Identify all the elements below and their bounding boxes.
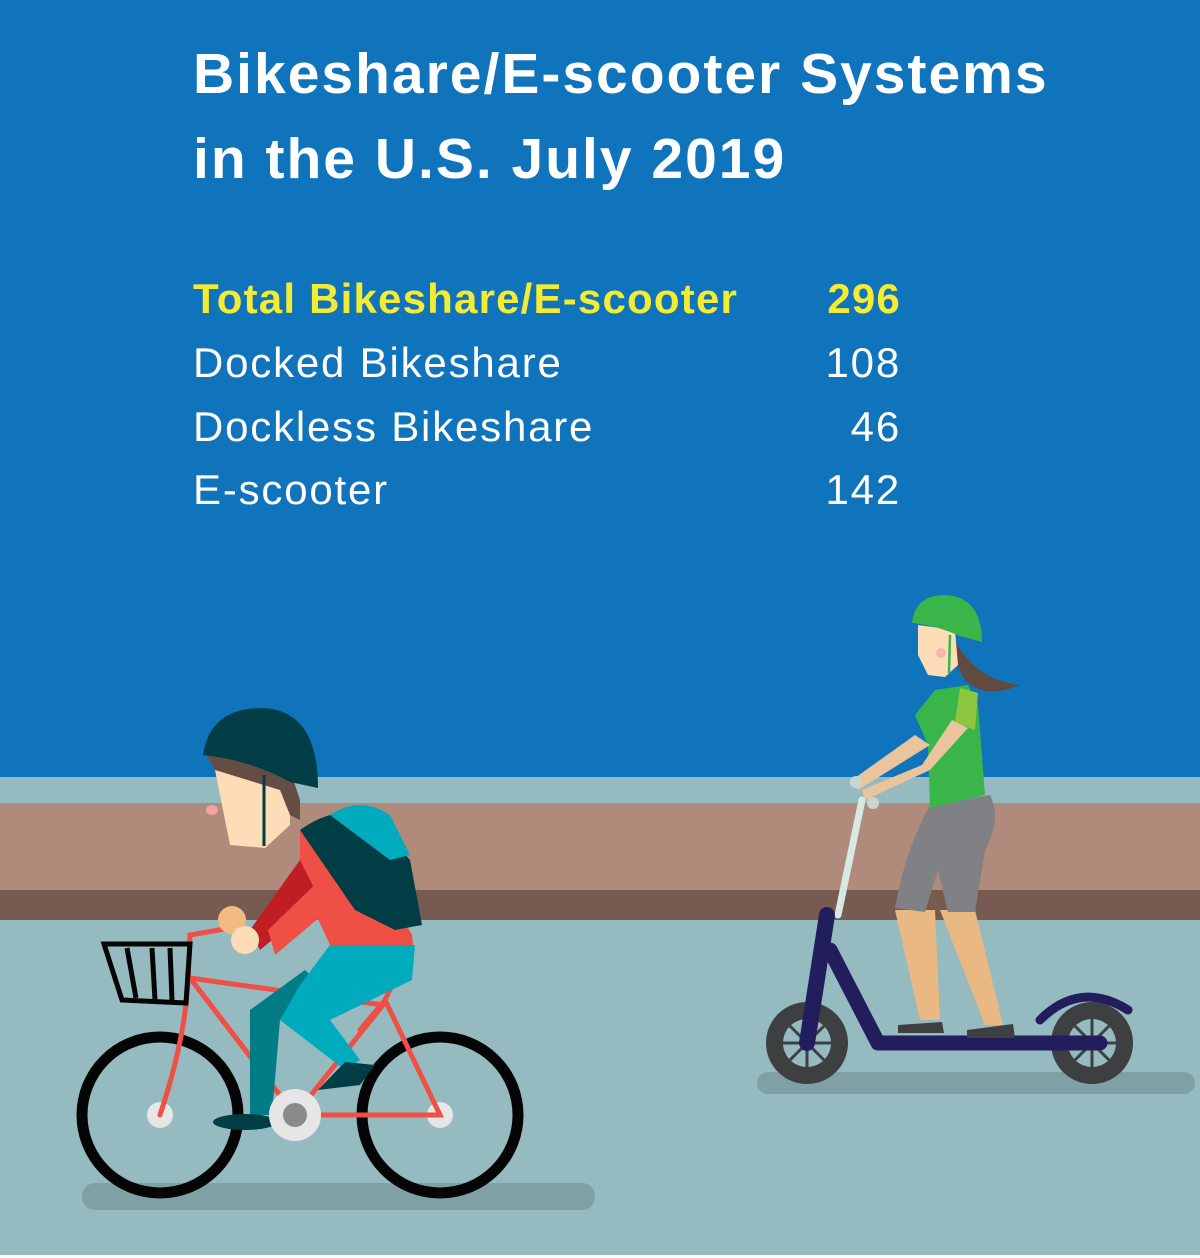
hair [950,640,1020,691]
title: Bikeshare/E-scooter Systems [193,42,1049,106]
basket [104,944,190,1003]
scooter rider [757,595,1195,1094]
dockless row: Dockless Bikeshare [193,403,594,450]
head [215,770,290,848]
total row: 296 [827,275,901,322]
title: in the U.S. July 2019 [193,127,786,191]
stats table [193,275,901,513]
legs [895,910,940,1020]
docked row: Docked Bikeshare [193,339,563,386]
shirt [915,685,985,808]
docked row: 108 [826,339,901,386]
cyclist [82,708,595,1210]
backpack [300,812,422,930]
total row: Total Bikeshare/E-scooter [193,275,738,322]
docked row [193,339,901,386]
e-scooter row: 142 [826,466,901,513]
scooter body [1040,997,1128,1020]
arms [852,735,930,790]
dockless row [193,403,901,450]
title [193,42,1049,191]
e-scooter row [193,466,901,513]
scooter wheels [771,1007,843,1079]
dockless row: 46 [851,403,901,450]
torso [300,818,413,945]
head [918,625,958,677]
e-scooter row: E-scooter [193,466,389,513]
bike frame [160,928,440,1115]
shorts [895,795,995,912]
bike wheels [82,1037,238,1193]
legs [250,970,330,1115]
